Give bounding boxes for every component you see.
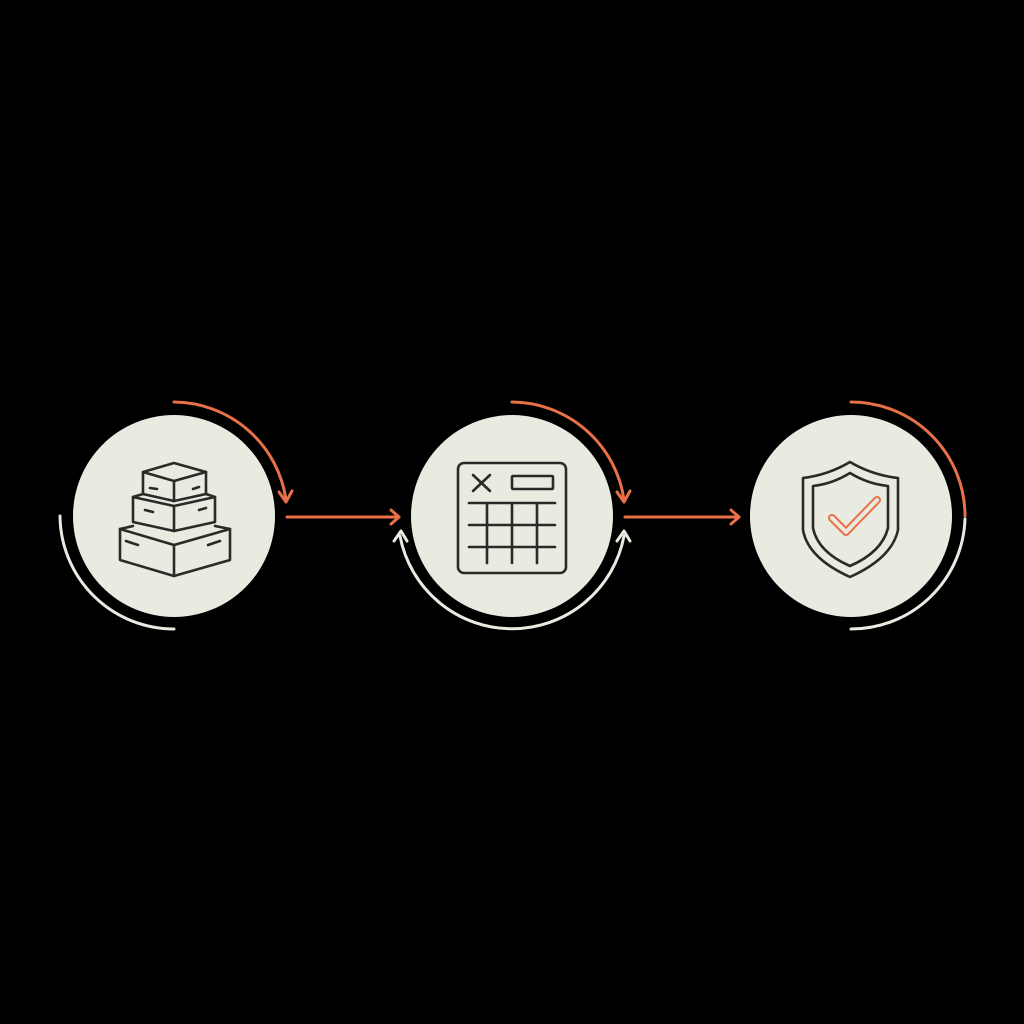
step 1: inventory boxes [60,402,292,629]
icon: spreadsheet [458,463,566,573]
icon: check mark [832,500,877,532]
icon: shield [803,462,898,577]
circle 3 [750,415,952,617]
cream arc [60,516,174,629]
circle 2 [411,415,613,617]
icon: stacked boxes [120,463,230,576]
cream arc [851,519,965,629]
arrow 2 [625,510,739,524]
step 3: verified shield [750,402,965,629]
orange arc [851,402,965,516]
circle 1 [73,415,275,617]
cream loop arc with arrows [394,531,630,629]
orange arc with arrow [174,402,292,502]
step 2: spreadsheet [394,402,630,629]
orange arc with arrow [512,402,630,502]
arrow 1 [287,510,399,524]
